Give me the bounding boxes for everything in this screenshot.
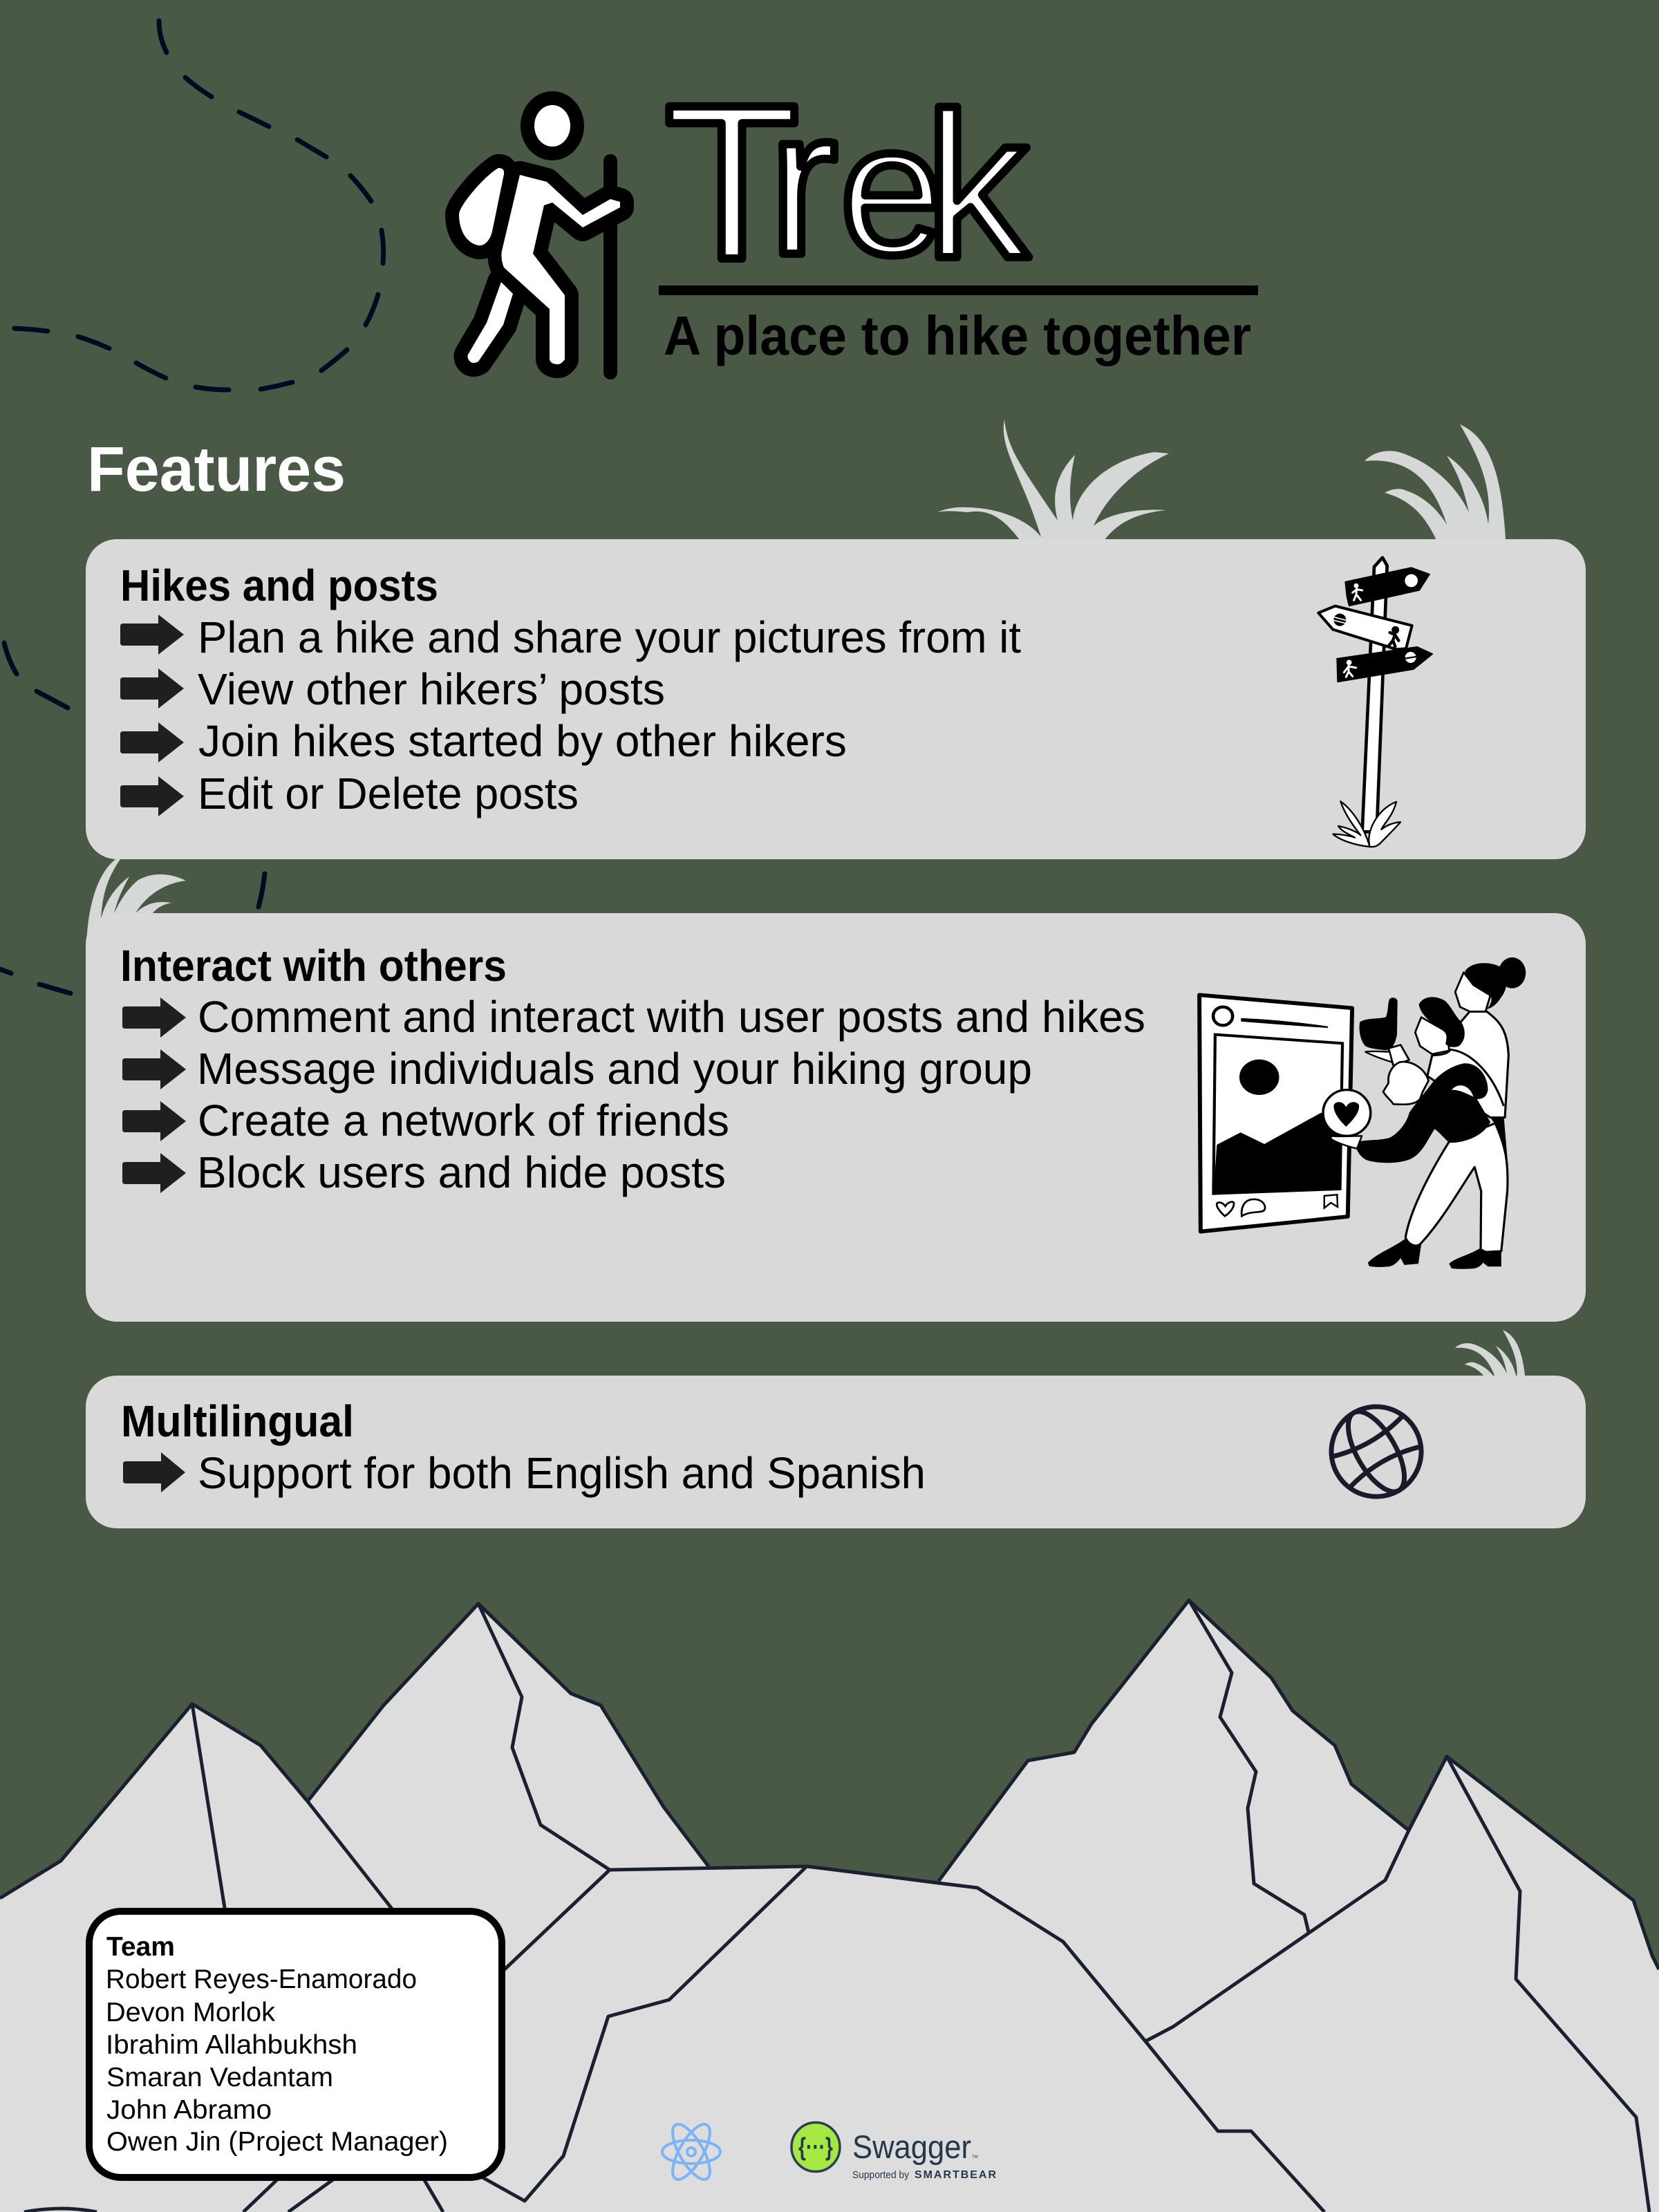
team members: Devon Morlok [106,1998,276,2027]
grass tuft above panel 1 right [1365,424,1506,553]
supported by: Supported by [852,2169,909,2181]
title rule [659,285,1258,295]
language text: Support for both English and Spanish [198,1448,926,1498]
heart bubble [1323,1090,1371,1136]
heading: interact with others: Interact with others [120,941,507,991]
team members: Smaran Vedantam [106,2063,333,2092]
team heading: Team [106,1932,175,1962]
list: hike features: Plan a hike and share your pictures from it [198,612,1021,662]
team members: Owen Jin (Project Manager) [106,2127,448,2157]
panel: multilingual [86,1376,1586,1528]
list: social features [197,992,1145,1197]
list: hike features: Edit or Delete posts [198,769,579,818]
heading: features: Features [87,434,346,505]
panel: hikes and posts [86,539,1586,859]
title: e [840,86,944,294]
mountains [0,1600,1659,2212]
logo: swagger [791,2122,996,2181]
icon: globe [1315,1390,1438,1513]
list: social features: Create a network of friends [198,1096,729,1145]
arrow bullets [120,615,184,816]
swagger braces: {···} [798,2133,833,2161]
logo: react [662,2119,720,2184]
logo: hiker icon [459,105,620,379]
swagger badge [791,2122,840,2172]
list: social features: Comment and interact with user posts and hikes [198,992,1145,1042]
title: k [925,69,1032,301]
front person [1331,1062,1508,1269]
heading: multilingual: Multilingual [121,1396,354,1446]
list: hike features [198,612,1021,818]
list: social features: Block users and hide posts [197,1147,726,1197]
team members: Ibrahim Allahbukhsh [106,2030,357,2060]
list: social features: Message individuals and your hiking group [197,1044,1032,1094]
title: r [769,66,838,298]
grass tuft above panel 1 [937,420,1169,541]
trademark: TM [972,2155,978,2159]
title: T [664,58,799,306]
subtitle: A place to hike together [664,305,1251,366]
illustration: people liking a social post [1199,957,1526,1269]
swagger wordmark: Swagger [852,2128,971,2165]
panel: team [89,1911,502,2177]
thumbs up [1360,997,1398,1050]
middle person [1365,997,1503,1106]
grass tuft above panel 2 [86,859,207,968]
icon: hiking staff [603,154,617,379]
team members [106,1965,448,2157]
panel: interact with others [86,913,1586,1322]
smartbear: SMARTBEAR [915,2169,996,2181]
heading: hikes and posts: Hikes and posts [120,561,438,610]
list: hike features: View other hikers’ posts [198,664,665,714]
arrow bullets [122,997,186,1193]
team members: Robert Reyes-Enamorado [106,1965,417,1994]
back person [1427,957,1526,1163]
team members: John Abramo [106,2095,272,2125]
list: hike features: Join hikes started by other hikers [198,716,847,766]
icon: signpost [1318,558,1433,847]
grass tuft above panel 3 [1455,1330,1526,1394]
dashed trail: top left [0,21,384,993]
arrow bullet [123,1452,185,1492]
post card [1199,995,1352,1232]
